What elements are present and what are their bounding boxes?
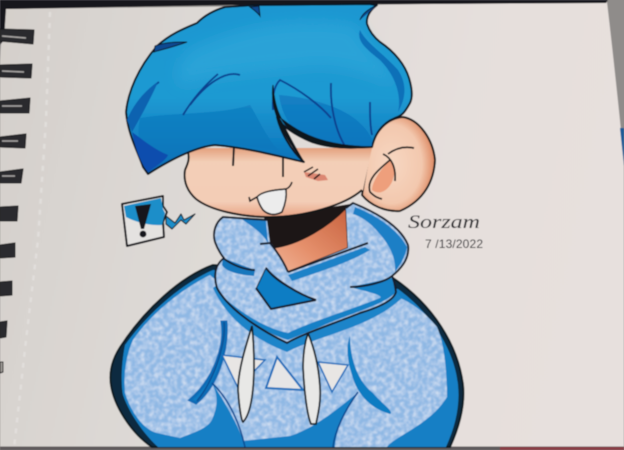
ear inner lines [369,147,414,199]
hair lighter highlight [178,21,395,85]
torso light fill [125,275,447,447]
hair mid shadow band [138,105,278,172]
hair strands [128,74,372,146]
center triangle print [266,357,303,390]
dark edge at bottom [0,446,624,450]
binding perforations [14,12,50,448]
collar lower band shadow [224,278,396,340]
right triangle print [318,362,348,392]
spiral binding rings [0,29,34,373]
blush marks [304,167,320,179]
right pocket shadow [348,336,391,414]
alert blue fill [124,198,165,225]
ear [362,117,435,211]
alert icon [122,196,195,246]
neck [272,208,348,272]
jaw outline [185,152,362,217]
mouth smile tail [249,182,292,201]
seam strokes [197,322,358,447]
hair top tuft marks [154,5,377,52]
left triangle print [222,355,265,388]
lightning bolt [166,214,195,229]
left pocket shadow [190,322,226,403]
cheek blush [304,172,328,181]
face shape [184,148,372,217]
hair dark left tuft [132,132,168,172]
collar outlines [214,203,408,343]
exclamation dot [140,231,146,237]
ear inner shade [372,160,394,192]
collar top left shadow [240,218,268,243]
collar center pocket [256,268,316,309]
right bang shadow [279,95,372,146]
alert box [122,196,167,246]
blue object at right edge [620,128,624,166]
hair strand lines over face [233,135,283,177]
ear shape [362,117,435,211]
hair left shadow stroke [127,82,158,132]
shadow under collar [213,285,402,352]
right drawstring [303,333,320,424]
collar inner fold shadow [288,247,370,281]
hair right shadow [359,30,404,112]
collar fill [214,203,408,343]
hood collar [214,203,408,343]
exclamation mark [135,204,151,229]
hoodie body [110,265,463,447]
torso silhouette [110,265,463,447]
date: 7 /13/2022 [425,237,483,251]
face [184,135,372,217]
dark edge at top [0,0,608,45]
hair dark bang edge [272,85,372,162]
mouth [257,189,286,214]
torso blue underlayer [122,270,459,447]
left drawstring [238,326,254,422]
collar right shadow [353,207,407,272]
red strip at bottom right [500,447,624,450]
signature: Sorzam [408,212,480,233]
hair [126,4,412,174]
collar left fold shadow [222,258,255,276]
neck shadow [264,204,350,270]
hair mass [126,4,412,174]
